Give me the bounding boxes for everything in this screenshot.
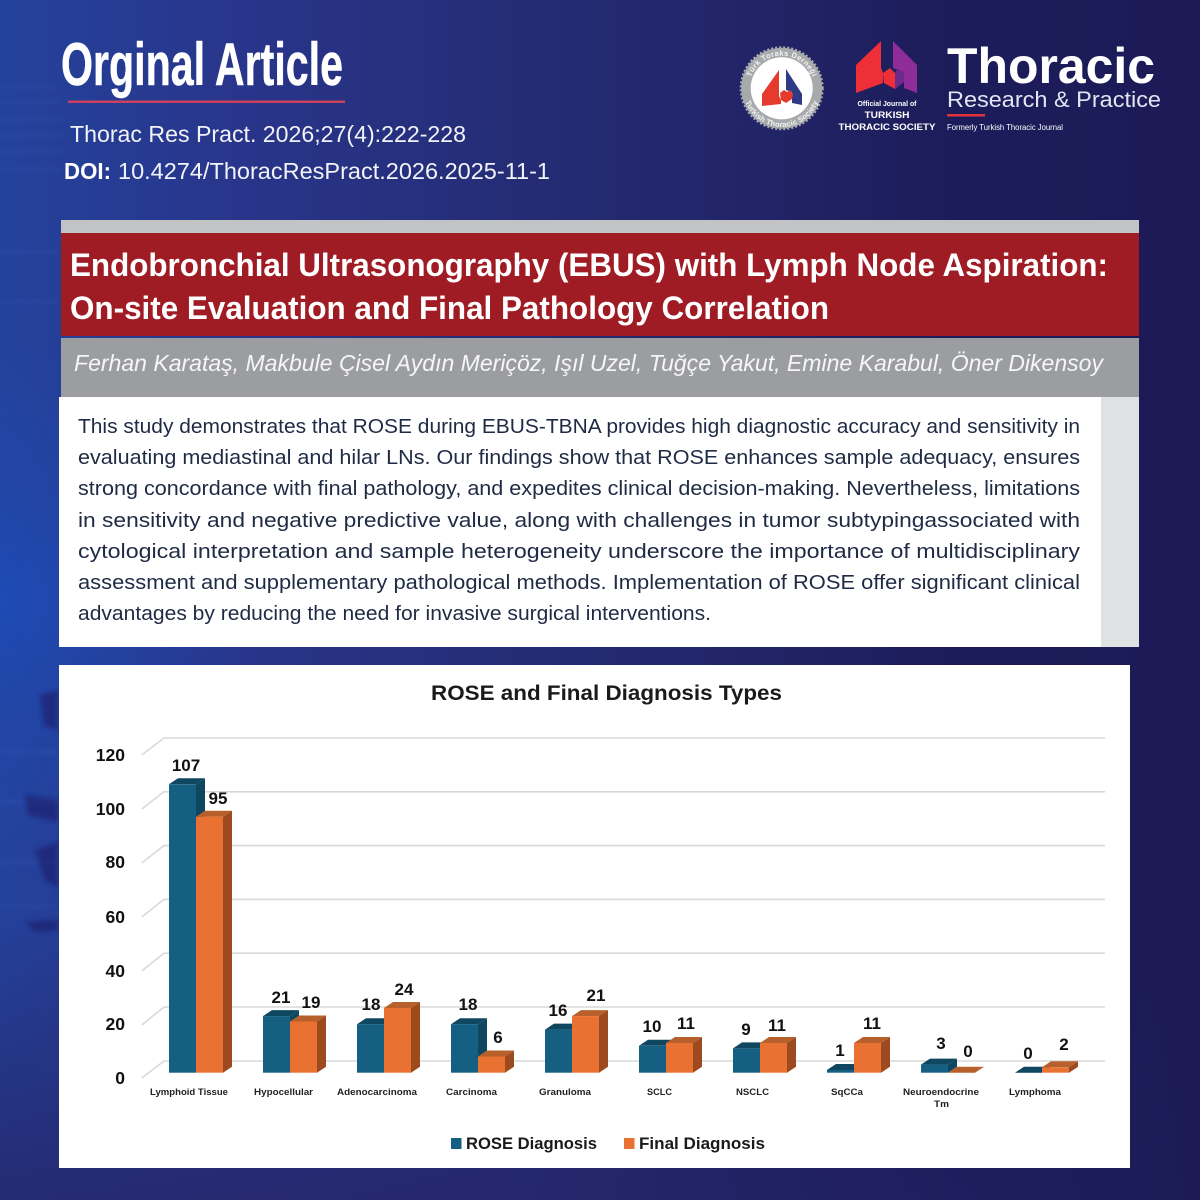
summary paragraph: evaluating mediastinal and hilar LNs. Our findings show that ROSE enhances sample adequacy, ensures: [78, 447, 1080, 469]
logo caption: official journal: Official Journal of: [858, 99, 917, 108]
panel: summary text: [59, 397, 1139, 647]
bars: SqCCa: [827, 1037, 890, 1073]
summary paragraph: assessment and supplementary pathological methods. Implementation of ROSE offer significant clinical: [78, 572, 1080, 594]
data labels: 3: [936, 1034, 946, 1053]
category labels: Carcinoma: [446, 1087, 498, 1098]
summary paragraph: cytological interpretation and sample heterogeneity underscore the importance of multidisciplinary: [78, 541, 1080, 563]
category labels: [150, 1087, 1062, 1110]
data labels: 6: [493, 1028, 503, 1047]
logo: Turkish Thoracic Society badge: Turkish Thoracic Society: [746, 100, 818, 127]
data labels: 11: [863, 1014, 881, 1033]
data labels: 2: [1059, 1035, 1069, 1054]
article title: On-site Evaluation and Final Pathology Correlation: [70, 290, 829, 326]
logo caption: official journal: TURKISH: [864, 110, 910, 121]
data labels: 95: [209, 789, 227, 808]
logo: Thoracic Research & Practice wordmark: Research & Practice: [947, 87, 1161, 112]
category labels: Adenocarcinoma: [337, 1087, 418, 1098]
bars: Lymphoid Tissue: [169, 778, 232, 1073]
summary paragraph: This study demonstrates that ROSE during EBUS-TBNA provides high diagnostic accuracy and sensitivity in: [78, 416, 1080, 438]
summary paragraph: strong concordance with final pathology, and expedites clinical decision-making. Nevertheless, limitations: [78, 478, 1080, 500]
gridlines: [142, 738, 1105, 1078]
y axis labels: [96, 745, 125, 1088]
bars: Neuroendocrine Tm: [921, 1059, 984, 1073]
data labels: [172, 756, 1069, 1063]
logo caption: official journal: [838, 99, 936, 133]
panel: chart: [59, 665, 1130, 1168]
y axis labels: 0: [115, 1068, 125, 1088]
doi: DOI:: [64, 158, 111, 184]
logo: Turkish Thoracic Society badge: [740, 46, 824, 130]
doi: 10.4274/ThoracResPract.2026.2025-11-1: [118, 158, 550, 184]
data labels: 0: [1023, 1044, 1033, 1063]
category labels: Neuroendocrine: [903, 1087, 979, 1098]
y axis labels: 20: [106, 1014, 125, 1034]
summary paragraph: [78, 416, 1080, 625]
category labels: Lymphoid Tissue: [150, 1087, 228, 1098]
data labels: 24: [395, 980, 414, 999]
category labels: Tm: [934, 1099, 949, 1110]
summary paragraph: in sensitivity and negative predictive value, along with challenges in tumor subtypingassociated with: [78, 510, 1080, 532]
category labels: SqCCa: [831, 1087, 864, 1098]
y axis labels: 100: [96, 799, 125, 819]
data labels: 11: [768, 1016, 786, 1035]
category labels: SCLC: [647, 1087, 672, 1098]
panel: title band: [61, 220, 1139, 336]
bars: Lymphoma: [1015, 1061, 1078, 1073]
legend: ROSE Diagnosis: [466, 1135, 597, 1153]
article title: [70, 247, 1108, 326]
bars: Carcinoma: [451, 1018, 514, 1073]
logo: Thoracic Research & Practice wordmark: Formerly Turkish Thoracic Journal: [947, 123, 1063, 132]
data labels: 107: [172, 756, 200, 775]
data labels: 21: [587, 986, 605, 1005]
data labels: 1: [835, 1041, 845, 1060]
summary paragraph: advantages by reducing the need for invasive surgical interventions.: [78, 603, 711, 625]
data labels: 18: [362, 995, 380, 1014]
category labels: Granuloma: [539, 1087, 592, 1098]
data labels: 21: [272, 988, 290, 1007]
category labels: NSCLC: [736, 1087, 769, 1098]
data labels: 9: [741, 1020, 751, 1039]
data labels: 18: [459, 995, 477, 1014]
data labels: 0: [963, 1042, 973, 1061]
logo: journal lungs mark: [856, 41, 917, 93]
article title: Endobronchial Ultrasonography (EBUS) with Lymph Node Aspiration:: [70, 247, 1108, 283]
y axis labels: 40: [106, 961, 125, 981]
data labels: 19: [302, 993, 320, 1012]
y axis labels: 120: [96, 745, 125, 765]
bars: SCLC: [639, 1037, 702, 1073]
data labels: 11: [677, 1014, 695, 1033]
y axis labels: 60: [106, 907, 125, 927]
logo caption: official journal: THORACIC SOCIETY: [838, 122, 936, 133]
legend: [451, 1135, 765, 1153]
logo: Thoracic Research & Practice wordmark: [947, 38, 1161, 132]
heading: Orginal Article: Orginal Article: [61, 31, 343, 98]
panel: authors: [61, 338, 1139, 397]
citation: Thorac Res Pract. 2026;27(4):222-228: [70, 121, 466, 147]
bars: NSCLC: [733, 1037, 796, 1073]
bars: Hypocellular: [263, 1010, 326, 1073]
data labels: 10: [643, 1017, 661, 1036]
category labels: Hypocellular: [254, 1087, 313, 1098]
category labels: Lymphoma: [1009, 1087, 1062, 1098]
bars: Adenocarcinoma: [357, 1002, 420, 1073]
y axis labels: 80: [106, 852, 125, 872]
panel: authors: Ferhan Karataş, Makbule Çisel Aydın Meriçöz, Işıl Uzel, Tuğçe Yakut, Emine Karabul, Öner Dikensoy: [74, 350, 1104, 376]
logo: Turkish Thoracic Society badge: Türk Toraks Derneği: [746, 50, 818, 76]
data labels: 16: [549, 1001, 567, 1020]
bars: Granuloma: [545, 1010, 608, 1073]
chart title: ROSE and Final Diagnosis Types: [431, 681, 782, 705]
logo: Thoracic Research & Practice wordmark: Thoracic: [947, 38, 1155, 94]
legend: Final Diagnosis: [639, 1135, 765, 1153]
